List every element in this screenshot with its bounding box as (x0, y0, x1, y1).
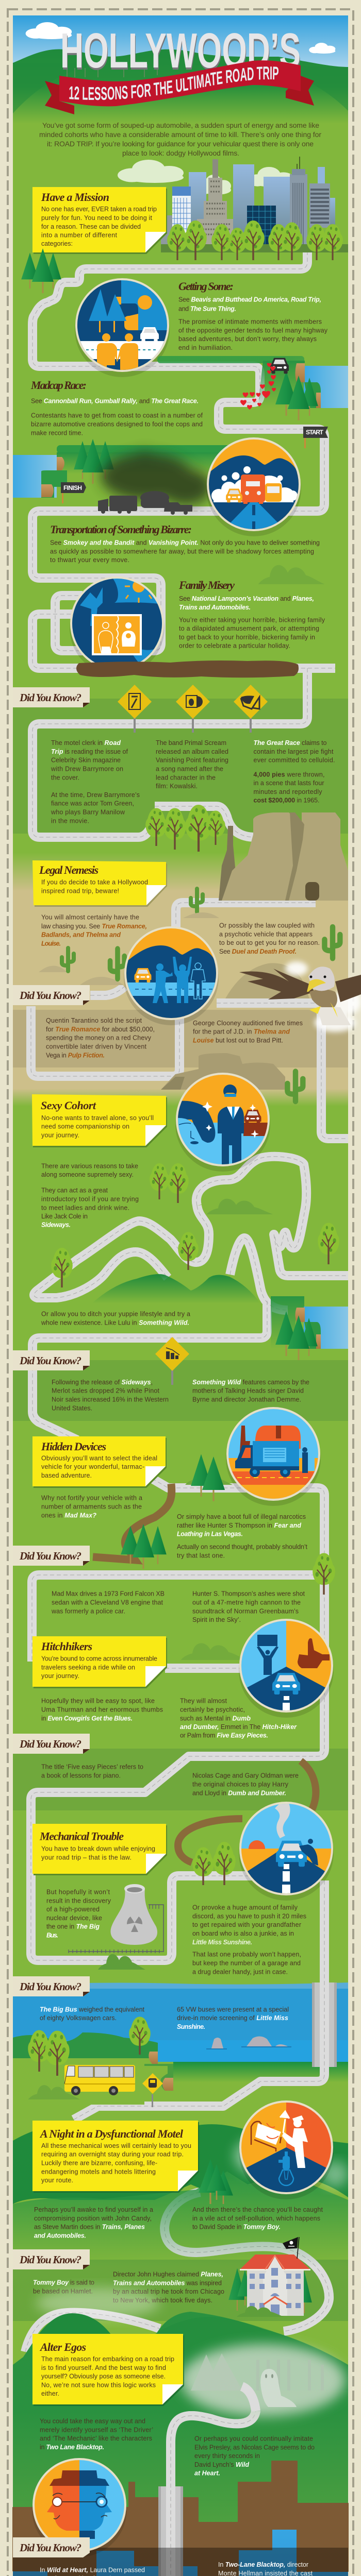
badge: hidden devices truck (226, 1407, 321, 1506)
scene: start and finish signs, convoy in smoke: START (306, 429, 324, 436)
text: Sexy Cohort reasons: Or allow you to ditch your yuppie lifestyle and try a (41, 1311, 190, 1318)
pines by motel road (199, 2159, 233, 2204)
text: motel examples: compromising position with John Candy, (34, 2215, 152, 2222)
text: Sexy Cohort reasons: They can act as a great (41, 1187, 108, 1194)
text: Legal Nemesis examples: law chasing you. See True Romance, (41, 923, 147, 930)
lesson 5 note: Hitchhikers: You’re bound to come across innumerable (41, 1655, 157, 1662)
text: Getting Some: end in humiliation. (178, 344, 233, 351)
badge: sexy cohort (175, 1073, 270, 1172)
text: did you know 6 facts (40, 2006, 289, 2030)
scene: love car and hearts by the lake (157, 356, 348, 420)
text: Legal Nemesis examples: Quentin Tarantino sold the script (46, 1017, 142, 1024)
text: Hidden Devices examples: Loathing in Las Vegas. (177, 1530, 243, 1537)
hills behind motel (13, 2123, 348, 2267)
intro text (39, 121, 321, 157)
text: did you know 3 facts (52, 1379, 309, 1412)
text: Getting Some: based adventures, but don’t worry, they always (178, 335, 317, 343)
text: did you know 1 facts: 4,000 pies were thrown, (254, 771, 325, 778)
lesson 3 note: Sexy Cohort (32, 1094, 167, 1147)
text: Madcap Race: Contestants have to get from coast to coast in a number of (31, 412, 203, 419)
text: did you know 3 facts: Noir sales increased 16% in the Western (52, 1396, 169, 1403)
text: did you know 5 facts (41, 1763, 299, 1797)
title: Hollywood sign and ribbon: 12 LESSONS FOR THE ULTIMATE ROAD TRIP (69, 66, 278, 100)
intro text: place to look: dodgy Hollywood films. (122, 149, 239, 157)
cracked motel building with pirate flag (228, 2237, 312, 2317)
text: Legal Nemesis examples (41, 914, 320, 1059)
text: Transportation of Something Bizarre: Transportation of Something Bizarre: (50, 523, 192, 536)
text: did you know 1 facts: The motel clerk in Road (51, 739, 121, 747)
text: Legal Nemesis examples: for the part of J.D. in Thelma and (193, 1028, 290, 1036)
lesson 4 note: Hidden Devices (32, 1436, 167, 1488)
tag: Did You Know 8: Did You Know? (19, 2541, 81, 2554)
text: did you know 7 facts: Tommy Boy is said to (33, 2279, 94, 2286)
text: did you know 4 facts (51, 1590, 305, 1623)
badge: transportation convoy (206, 437, 301, 536)
text: Mechanical Trouble examples: to get repaired with your grandfather (192, 1921, 301, 1928)
badge: legal nemesis police (124, 926, 219, 1025)
tag: Did You Know 3: Did You Know? (19, 1354, 81, 1367)
text: did you know 4 facts: Hunter S. Thompson’s ashes were shot (192, 1590, 305, 1597)
text: Hitchhikers examples: such as Mental in Dumb (180, 1715, 251, 1722)
text: Hidden Devices examples: Actually on second thought, probably shouldn’t (177, 1544, 308, 1551)
lesson 8 note: Alter Egos: either. (41, 2390, 59, 2397)
text: did you know 5 facts: The title ‘Five easy Pieces’ refers to (41, 1763, 143, 1770)
text: Legal Nemesis examples: for True Romance for about $50,000, (46, 1026, 155, 1033)
tag: Did You Know 6: Did You Know? (19, 1980, 81, 1993)
tag: Did You Know 7 (13, 2249, 90, 2269)
text: Hidden Devices examples (41, 1494, 308, 1559)
text: Family Misery: order to celebrate a particular holiday. (179, 642, 290, 649)
mud track and trees near breakdown (178, 1761, 316, 1885)
lake scene with rocks, land, bus and sign (13, 2016, 291, 2107)
lesson 7 note: A Night in a Dysfunctional Motel: your route. (41, 2177, 73, 2184)
lesson 1 note: Have a Mission: No one has ever, EVER taken a road trip (41, 206, 157, 213)
lesson 6 note: Mechanical Trouble (32, 1824, 167, 1875)
text: Mechanical Trouble examples (46, 1889, 306, 1975)
lesson 8 note: Alter Egos: The main reason for embarking on a road trip (41, 2355, 174, 2363)
text: motel examples: and Automobiles. (34, 2232, 86, 2239)
text: did you know 1 facts: At the time, Drew Barrymore’s (51, 791, 140, 799)
text: Transportation of Something Bizarre (50, 523, 320, 564)
text: did you know 7 facts: Trains and Automobiles was inspired (113, 2279, 222, 2286)
text: Alter Egos examples: at Heart. (194, 2470, 220, 2477)
text: did you know 6 facts: of eighty Volkswagen cars. (40, 2014, 117, 2022)
text: Madcap Race: Madcap Race: (30, 379, 87, 392)
hills, lake and trees (51, 1163, 348, 1360)
text: Madcap Race (30, 379, 203, 437)
text: Legal Nemesis examples: spending the money on a red Chevy (46, 1035, 152, 1042)
text: Hitchhikers examples (41, 1697, 297, 1739)
lesson 4 note: Hidden Devices: Obviously you’ll want to select the ideal (41, 1455, 157, 1462)
text: did you know 1 facts: ever committed to celluloid. (254, 756, 335, 764)
badge: alter egos split face (32, 2458, 127, 2557)
lesson 4 note: Hidden Devices: Hidden Devices (41, 1440, 106, 1453)
lesson 3 note: Sexy Cohort: your journey. (41, 1131, 79, 1139)
text: did you know 6 facts: Sunshine. (177, 2023, 205, 2030)
badge: hitchhiker (239, 1619, 334, 1718)
text: did you know 1 facts: Celebrity Skin magazine (51, 756, 121, 764)
text: motel examples: Perhaps you’ll awake to find yourself in a (34, 2206, 153, 2213)
lesson 1 note: Have a Mission (32, 187, 167, 254)
text: Sexy Cohort reasons: introductory tool if you are trying (41, 1195, 139, 1202)
city skyline with trees (118, 157, 348, 260)
tag: Did You Know 4 (13, 1546, 90, 1566)
lesson 7 note: A Night in a Dysfunctional Motel: All these mechanical woes will certainly lead to you (41, 2142, 191, 2149)
tag: Did You Know 3 (13, 1350, 90, 1370)
lesson 4 note: Hidden Devices: vehicle for your wonderful, tarmac- (41, 1463, 144, 1470)
bush (258, 565, 324, 584)
text: did you know 1 facts: in a scene that lasts four (254, 779, 324, 787)
text: Mechanical Trouble examples: result in the discovery (46, 1897, 111, 1904)
text: Legal Nemesis examples: Or possibly the law coupled with (219, 922, 315, 929)
lesson 2 note: Legal Nemesis: inspired road trip, beware! (41, 887, 119, 894)
text: did you know 1 facts: lead character in the (156, 774, 216, 781)
dark overlay band under the brown canyon (13, 2548, 348, 2576)
bald eagle (239, 961, 361, 1032)
text: Getting Some: Getting Some: (178, 280, 234, 293)
text: did you know 1 facts: film: Kowalski. (156, 783, 198, 790)
text: Alter Egos examples: You could take the easy way out and (40, 2417, 145, 2425)
text: Legal Nemesis examples: a psychotic vehicle that appears (219, 930, 313, 938)
text: did you know 3 facts: Byrne and director Jonathan Demme. (192, 1396, 301, 1403)
tag: Did You Know 1: Did You Know? (19, 691, 81, 704)
text: did you know 1 facts (51, 739, 335, 824)
lesson 1 note: Have a Mission: into a number of different (41, 232, 118, 239)
text: Mechanical Trouble examples: Little Miss Sunshine. (192, 1939, 252, 1946)
text: Sexy Cohort reasons: along someone supremely sexy. (41, 1171, 134, 1178)
tag: Did You Know 2 (13, 985, 90, 1005)
text: Alter Egos examples: every thirty seconds in (194, 2452, 260, 2460)
lesson 7 note: A Night in a Dysfunctional Motel: requiring an overnight stay during your road trip. (41, 2151, 184, 2158)
text: did you know 7 facts: to New York, which took five days. (113, 2297, 212, 2304)
text: Legal Nemesis examples: to be out to get you for no reason. (219, 939, 320, 946)
text: Alter Egos examples: Or perhaps you could continually imitate (194, 2435, 313, 2442)
text: did you know 1 facts: the cover. (51, 774, 79, 781)
text: Madcap Race: bizarre automotive creations designed to fool the cops and (31, 420, 203, 428)
text: did you know 6 facts: drive-in movie screening of Little Miss (177, 2014, 288, 2022)
text: Getting Some: See Beavis and Butthead Do America, Road Trip, (178, 296, 321, 303)
text: motel examples: in a vile act of self-pollution, which happens (192, 2215, 320, 2222)
lesson 2 note: Legal Nemesis (32, 860, 167, 907)
text: Mechanical Trouble examples: But hopefully it won’t (46, 1889, 110, 1896)
text: did you know 1 facts: The Great Race claims to (254, 739, 327, 747)
lesson 8 note: Alter Egos: Alter Egos (39, 2341, 86, 2353)
lesson 2 note: Legal Nemesis: Legal Nemesis (39, 863, 99, 876)
text: Mechanical Trouble examples: a drug dealer handy, just in case. (192, 1968, 288, 1975)
text: Alter Egos examples (40, 2417, 315, 2477)
text: Transportation of Something Bizarre: See Smokey and the Bandit and Vanishing Point. Not only do you have to deliver something (50, 539, 320, 546)
text: Alter Egos examples: in Two Lane Blacktop. (40, 2444, 104, 2451)
text: did you know 8 facts (40, 2561, 317, 2576)
text: Sexy Cohort reasons (41, 1162, 190, 1326)
text: Legal Nemesis examples: Louise but lost out to Brad Pitt. (193, 1037, 283, 1044)
text: Family Misery: to get back to your horrible, bickering family in (179, 634, 315, 641)
lesson 2 note: Legal Nemesis: If you do decide to take a Hollywood (41, 879, 148, 886)
text: did you know 3 facts: United States. (52, 1404, 92, 1412)
text: motel examples (34, 2206, 323, 2239)
lesson 4 note: Hidden Devices: based adventure. (41, 1472, 92, 1479)
text: Family Misery: You’re either taking your horrible, bickering family (179, 616, 325, 623)
mesa rocks and cactus (161, 1053, 303, 1101)
text: did you know 8 facts: In Two-Lane Blacktop, director (218, 2561, 308, 2568)
desert scenery with cacti (39, 889, 340, 998)
text: Mechanical Trouble examples: That last one probably won’t happen, (192, 1951, 301, 1958)
lesson 3 note: Sexy Cohort: Sexy Cohort (41, 1099, 96, 1112)
text: did you know 1 facts: cost $200,000 in 1965. (254, 796, 320, 804)
lesson 5 note: Hitchhikers (32, 1636, 167, 1688)
lesson 1 note: Have a Mission: categories: (41, 240, 73, 247)
text: Hidden Devices examples: try that last one. (177, 1552, 225, 1559)
lesson 1 note: Have a Mission: Have a Mission (41, 191, 109, 204)
text: Family Misery: to a dilapidated amusement park, or attempting (179, 625, 319, 632)
text: Mechanical Trouble examples: nuclear device, like (46, 1914, 102, 1922)
text: did you know 3 facts: Merlot sales dropped 2% while Pinot (52, 1387, 160, 1394)
canyon rocks (219, 812, 348, 901)
text: motel examples: as Steve Martin does in Trains, Planes (34, 2224, 145, 2231)
text: Family Misery: Family Misery (178, 579, 235, 591)
nuclear cooling tower and fence (69, 1884, 163, 1970)
title: Hollywood sign and ribbon (26, 22, 335, 114)
text: did you know 7 facts (33, 2271, 224, 2304)
text: Legal Nemesis examples: See Duel and Death Proof. (219, 948, 297, 955)
lesson 5 note: Hitchhikers: your journey. (41, 1672, 79, 1680)
text: Transportation of Something Bizarre: as quickly as possible to somewhere far away, but there will be shadowy forces attempting (50, 548, 314, 555)
text: Hidden Devices examples: number of armaments such as the (41, 1503, 142, 1511)
tag: Did You Know 4: Did You Know? (19, 1550, 81, 1562)
text: Legal Nemesis examples: Badlands, and Thelma and (41, 931, 121, 939)
text: did you know 3 facts: Something Wild features cameos by the (192, 1379, 309, 1386)
text: did you know 7 facts: be based on Hamlet. (33, 2287, 93, 2295)
mud smear on the road (76, 660, 299, 677)
text: did you know 1 facts: Trip is reading the issue of (51, 748, 128, 755)
lesson 1 note: Have a Mission: for a reason. These can be divided (41, 223, 141, 230)
text: Alter Egos examples: Elvis Presley, as Nicolas Cage seems to do (194, 2444, 315, 2451)
text: Getting Some: and The Sure Thing. (178, 305, 236, 312)
text: Mechanical Trouble examples: on board who is also a junkie, as in (192, 1930, 294, 1937)
badge: Getting Some couple (75, 278, 170, 377)
intro text: You’ve got some form of souped-up automobile, a sudden spurt of energy and some like (42, 121, 319, 129)
text: did you know 1 facts: with Drew Barrymore on (51, 766, 123, 773)
text: Transportation of Something Bizarre: to thwart your every move. (50, 556, 129, 564)
text: did you know 4 facts: Spirit in the Sky’. (192, 1616, 241, 1623)
lesson 1 note: Have a Mission: purely for fun. You need to be doing it (41, 214, 153, 222)
text: Hitchhikers examples: and Dumber, Emmet in The Hitch-Hiker (180, 1723, 297, 1731)
text: did you know 1 facts: fiance was actor Tom Green, (51, 800, 134, 807)
text: Legal Nemesis examples: Vega in Pulp Fiction. (46, 1052, 105, 1059)
tag: Did You Know 7: Did You Know? (19, 2253, 81, 2266)
fog and foreground hills (13, 2287, 348, 2416)
text: did you know 8 facts: In Wild at Heart, Laura Dern passed (40, 2566, 145, 2573)
tag: Did You Know 1 (13, 687, 90, 707)
text: Mechanical Trouble examples: Or provoke a huge amount of family (192, 1904, 298, 1911)
intro text: it: ROAD TRIP. If you’re looking for guidance for your vehicular quest there is only one (47, 140, 314, 148)
lesson 3 note: Sexy Cohort: need some companionship on (41, 1123, 129, 1130)
text: Mechanical Trouble examples: of a high-powered (46, 1906, 100, 1913)
scene: start and finish signs, convoy in smoke: FINISH (63, 484, 82, 492)
intro text: minded cohorts who have a considerable amount of time to kill. There’s only one thing for (39, 130, 321, 139)
text: motel examples: And then there’s the chance you’ll be caught (192, 2206, 323, 2213)
text: did you know 1 facts: who plays Barry Manilow (51, 809, 125, 816)
text: Family Misery (178, 579, 325, 649)
text: Legal Nemesis examples: Louise. (41, 940, 61, 947)
text: Madcap Race: make record time. (31, 430, 83, 437)
text: did you know 7 facts: Director John Hughes claimed Planes, (113, 2271, 223, 2278)
text: did you know 7 facts: by an actual trip he took from Chicago (113, 2288, 224, 2295)
text: did you know 1 facts: released an album called (156, 748, 228, 755)
text: Madcap Race: See Cannonball Run, Gumball Rally, and The Great Race. (31, 398, 199, 405)
text: did you know 5 facts: and Lloyd in Dumb and Dumber. (192, 1790, 286, 1797)
lesson 7 note: A Night in a Dysfunctional Motel: endangering motels and hotels littering (41, 2168, 156, 2175)
text: did you know 1 facts: The band Primal Scream (156, 739, 226, 747)
text: Legal Nemesis examples: convertible later driven by Vincent (46, 1043, 147, 1050)
text: did you know 6 facts: 65 VW buses were present at a special (177, 2006, 289, 2013)
lesson 7 note: A Night in a Dysfunctional Motel (32, 2121, 199, 2193)
text: Sexy Cohort reasons: whole new existence. Like Lulu in Something Wild. (41, 1319, 189, 1326)
text: Alter Egos examples: and ‘The Mechanic’ like the characters (40, 2435, 152, 2442)
badge: family misery torn photo (70, 577, 165, 663)
tag: Did You Know 5: Did You Know? (19, 1738, 81, 1750)
text: Getting Some: of the opposite gender tends to fuel many highway (178, 327, 328, 334)
text: Getting Some (178, 280, 328, 351)
lesson 6 note: Mechanical Trouble: You have to break down while enjoying (41, 1845, 155, 1853)
text: did you know 1 facts: a song named after the (156, 766, 223, 773)
text: Alter Egos examples: David Lynch’s Wild (194, 2461, 249, 2468)
text: did you know 4 facts: soundtrack of Norman Greenbaum’s (192, 1607, 299, 1615)
text: motel examples: to David Spade in Tommy Boy. (192, 2224, 281, 2231)
lesson 7 note: A Night in a Dysfunctional Motel: Luckily there are bizarre, confusing, life- (41, 2160, 157, 2167)
text: Hitchhikers examples: Uma Thurman and her enormous thumbs (41, 1706, 163, 1714)
road signs: did you know 1 (118, 685, 268, 733)
road sign: wine sales (155, 1337, 189, 1385)
text: Getting Some: The promise of intimate moments with members (178, 318, 322, 326)
text: Family Misery: Trains and Automobiles. (179, 604, 251, 611)
tag: Did You Know 2: Did You Know? (19, 989, 81, 1002)
text: Mechanical Trouble examples: the one in The Big (46, 1923, 100, 1930)
text: Sexy Cohort reasons: Sideways. (41, 1221, 71, 1228)
text: Legal Nemesis examples: George Clooney auditioned five times (193, 1020, 303, 1027)
badge: mechanical trouble (239, 1802, 334, 1901)
text: Hidden Devices examples: Why not fortify your vehicle with a (41, 1494, 142, 1501)
text: did you know 6 facts: The Big Bus weighed the equivalent (40, 2006, 145, 2013)
text: did you know 1 facts: minutes and reportedly (254, 788, 322, 795)
tag: Did You Know 6 (13, 1976, 90, 1996)
text: did you know 5 facts: the original choices to play Harry (192, 1781, 289, 1788)
text: did you know 5 facts: a book of lessons for piano. (41, 1772, 121, 1780)
text: did you know 1 facts: contain the largest pie fight (254, 748, 334, 755)
text: Hidden Devices examples: rather like Hunter S Thompson in Fear and (177, 1522, 301, 1529)
text: Mechanical Trouble examples: Bus. (46, 1931, 58, 1939)
lesson 6 note: Mechanical Trouble: your road trip – that is the law. (41, 1854, 132, 1861)
text: did you know 5 facts: Nicolas Cage and Gary Oldman were (192, 1772, 299, 1780)
lesson 3 note: Sexy Cohort: No-one wants to travel alone, so you’ll (41, 1114, 154, 1122)
badge: dysfunctional motel (239, 2100, 334, 2199)
text: Hitchhikers examples: in Even Cowgirls Get the Blues. (41, 1715, 133, 1722)
tag: Did You Know 8 (13, 2537, 90, 2557)
text: Hitchhikers examples: certainly be psychotic, (180, 1706, 245, 1714)
lesson 6 note: Mechanical Trouble: Mechanical Trouble (39, 1830, 124, 1842)
lesson 8 note: Alter Egos: yourself? Obviously pose as someone else. (41, 2373, 166, 2380)
trees (145, 805, 225, 852)
text: did you know 4 facts: out of a 47-metre high cannon to the (192, 1599, 301, 1606)
text: Hitchhikers examples: Hopefully they will be easy to spot, like (41, 1697, 155, 1704)
text: Hidden Devices examples: ones in Mad Max? (41, 1512, 96, 1519)
text: Mechanical Trouble examples: but keep the number of a garage and (192, 1960, 301, 1967)
tag: Did You Know 5 (13, 1734, 90, 1754)
text: Legal Nemesis examples: You will almost certainly have the (41, 914, 139, 921)
text: did you know 4 facts: was formerly a police car. (51, 1607, 125, 1615)
pine trees (21, 248, 61, 293)
text: did you know 3 facts: Following the release of Sideways, (52, 1379, 153, 1386)
text: Mechanical Trouble examples: discord, as you have to push it 20 miles (192, 1912, 306, 1920)
mud track and pines (93, 1454, 335, 1660)
lesson 8 note: Alter Egos: No, we’re not sure how this logic works (41, 2381, 156, 2388)
text: Family Misery: See National Lampoon’s Vacation and Planes, (179, 595, 314, 602)
lesson 8 note: Alter Egos: is to find yourself. And the best way to find (41, 2364, 166, 2371)
lesson 8 note: Alter Egos (32, 2334, 184, 2406)
text: did you know 4 facts: Mad Max drives a 1973 Ford Falcon XB (52, 1590, 165, 1597)
text: did you know 4 facts: sedan with a Cleveland V8 engine that (52, 1599, 163, 1606)
text: Hidden Devices examples: Or simply have a boot full of illegal narcotics (177, 1513, 306, 1520)
text: Hitchhikers examples: or Palm from Five Easy Pieces. (180, 1732, 268, 1739)
text: did you know 3 facts: mothers of Talking Heads singer David (192, 1387, 304, 1394)
text: Alter Egos examples: merely identify yourself as ‘The Driver’ (40, 2426, 153, 2433)
text: Sexy Cohort reasons: Like Jack Cole in (41, 1213, 88, 1220)
text: did you know 1 facts: Vanishing Point featuring (156, 756, 228, 764)
text: did you know 1 facts: in the movie. (51, 817, 89, 824)
lesson 5 note: Hitchhikers: travelers seeking a ride while on (41, 1664, 135, 1671)
lesson 5 note: Hitchhikers: Hitchhikers (41, 1640, 92, 1653)
text: Hitchhikers examples: They will almost (180, 1697, 227, 1704)
lesson 7 note: A Night in a Dysfunctional Motel: A Night in a Dysfunctional Motel (39, 2127, 184, 2140)
scene: start and finish signs, convoy in smoke (13, 427, 328, 515)
text: Sexy Cohort reasons: There are various reasons to take (41, 1162, 138, 1170)
text: Sexy Cohort reasons: to meet ladies and drink wine. (41, 1205, 129, 1212)
